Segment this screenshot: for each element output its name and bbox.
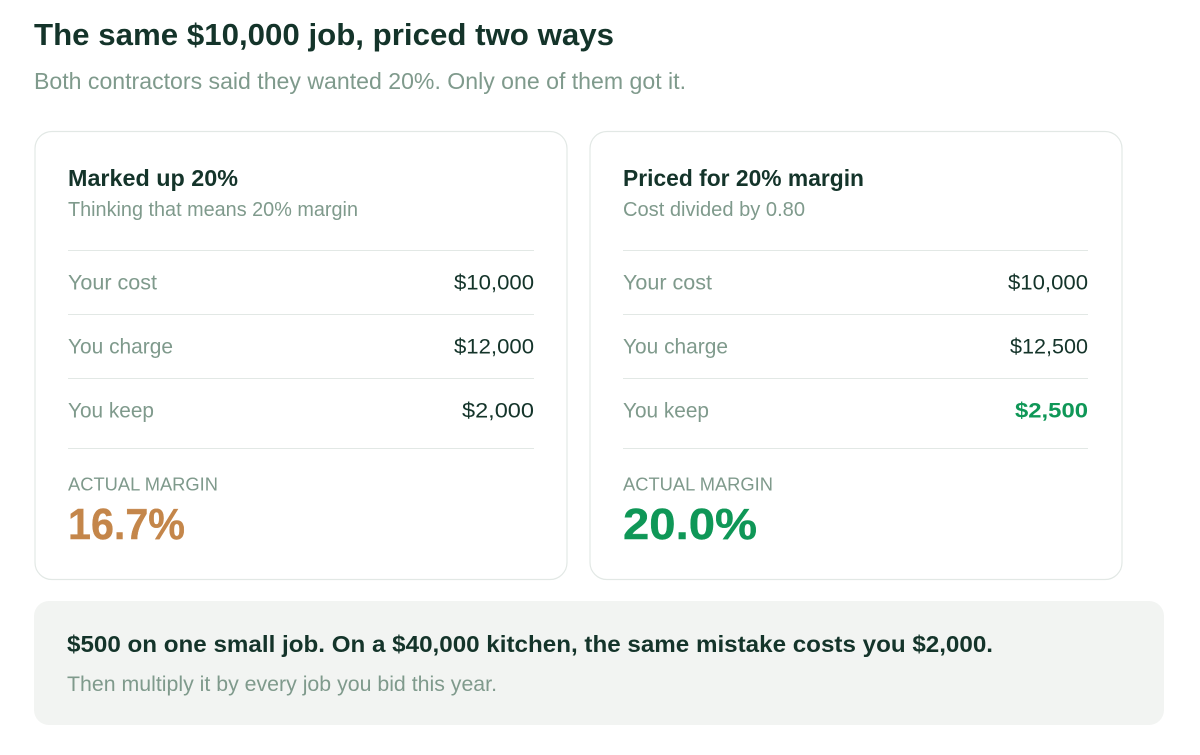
callout xyxy=(34,601,1164,725)
row: you charge: You charge xyxy=(623,334,728,358)
panel: marked up 20% xyxy=(35,132,567,580)
panel heading: priced for margin: Priced for 20% margin xyxy=(623,165,864,191)
row: your cost: Your cost xyxy=(623,270,712,294)
row: you keep xyxy=(68,398,534,422)
row: you keep: You keep xyxy=(623,398,709,422)
callout headline: $500 on one small job. On a $40,000 kitchen, the same mistake costs you $2,000. xyxy=(67,631,993,657)
row: you keep: $2,000 xyxy=(462,398,534,422)
row: you keep: You keep xyxy=(68,398,154,422)
row: your cost xyxy=(68,270,534,294)
value: 20.0%: 20.0% xyxy=(623,500,757,549)
row: you keep: $2,500 xyxy=(1015,398,1088,422)
subtitle: Both contractors said they wanted 20%. Only one of them got it. xyxy=(34,68,686,94)
panel: priced for 20% margin xyxy=(590,132,1122,580)
row: your cost: $10,000 xyxy=(454,270,534,294)
row: your cost xyxy=(623,270,1088,294)
callout body: Then multiply it by every job you bid this year. xyxy=(67,673,497,696)
row: your cost: Your cost xyxy=(68,270,157,294)
row: you charge xyxy=(623,334,1088,358)
row: you charge: $12,500 xyxy=(1010,334,1088,358)
title: The same $10,000 job, priced two ways xyxy=(34,17,614,52)
panel subheading: marked up: Thinking that means 20% margin xyxy=(68,199,358,221)
row: you charge xyxy=(68,334,534,358)
panel subheading: priced for margin: Cost divided by 0.80 xyxy=(623,199,805,221)
label: actual margin: ACTUAL MARGIN xyxy=(68,474,218,494)
row: you keep xyxy=(623,398,1088,422)
label: actual margin: ACTUAL MARGIN xyxy=(623,474,773,494)
row: you charge: $12,000 xyxy=(454,334,534,358)
row: your cost: $10,000 xyxy=(1008,270,1088,294)
row: you charge: You charge xyxy=(68,334,173,358)
value: 16.7%: 16.7% xyxy=(68,500,185,549)
panel heading: marked up: Marked up 20% xyxy=(68,165,238,191)
